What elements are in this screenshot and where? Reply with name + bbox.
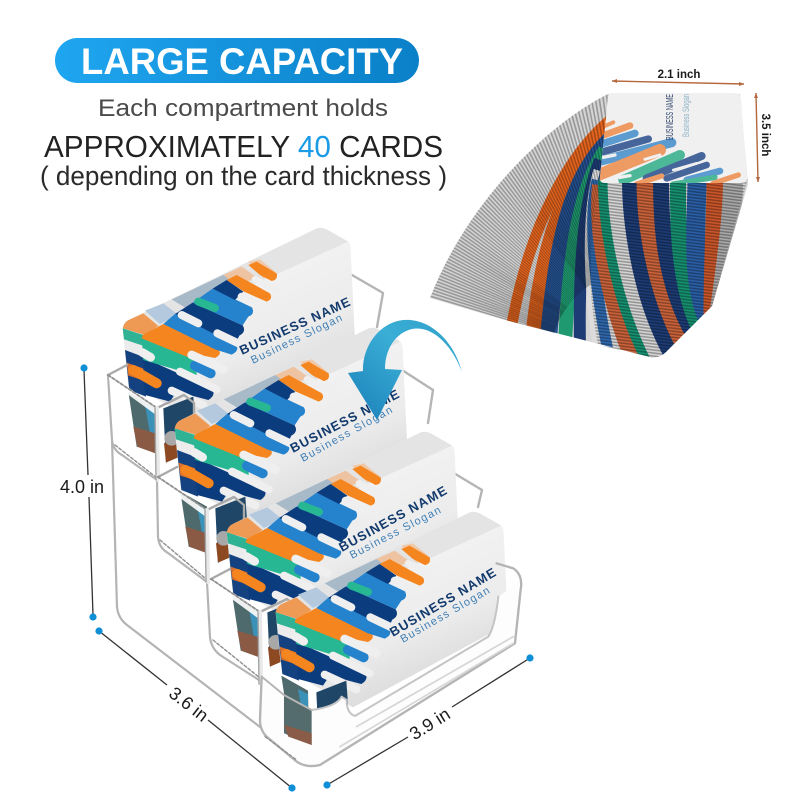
business card stack 4: Business Slogan: [398, 585, 492, 646]
title pill: LARGE CAPACITY: [81, 40, 403, 82]
business card stack 3: [211, 432, 459, 684]
icon: curved blue arrow: [348, 320, 462, 420]
business card stack 4: [276, 512, 508, 747]
business card stack 1: Business Slogan: [249, 312, 344, 367]
dimension: 3.6 in: [95, 627, 296, 792]
colored card edge bands: [510, 120, 733, 365]
subtitle: compartment text: Each compartment holds: [98, 95, 388, 122]
dimension: 4.0 in: [60, 364, 104, 621]
acrylic holder: back walls and base outline: [108, 275, 482, 727]
dimension: 3.9 in: 3.9 in: [406, 704, 454, 744]
dimension: 2.1 inch: 2.1 inch: [658, 69, 700, 81]
subtitle: compartment text: APPROXIMATELY 40 CARDS: [44, 129, 443, 164]
business card stack 2: Business Slogan: [299, 404, 395, 465]
subtitle: compartment text: ( depending on the card thickness ): [40, 161, 447, 191]
dimension: 4.0 in: 4.0 in: [60, 477, 104, 497]
top card face: [598, 93, 747, 184]
dimension: 3.6 in: 3.6 in: [165, 683, 212, 726]
business card stack 2: [158, 328, 407, 582]
dimension: 3.5 inch: 3.5 inch: [759, 114, 771, 156]
fanned card stack: [430, 93, 748, 358]
top card face: BUSINESS NAME: [665, 94, 676, 140]
subtitle: compartment text: [40, 95, 447, 191]
business card stack 2: BUSINESS NAME: [287, 386, 402, 456]
business card stack 1: [108, 228, 355, 480]
business card stack 3: BUSINESS NAME: [336, 483, 450, 555]
dimension: 3.9 in: [323, 654, 534, 789]
dimension: 2.1 inch: [612, 69, 744, 86]
top card face: Business Slogan: [681, 94, 691, 137]
business card stack 1: BUSINESS NAME: [237, 294, 353, 358]
dimension: 3.5 inch: [754, 93, 771, 182]
business card stack 3: Business Slogan: [348, 504, 443, 562]
business card stack 4: BUSINESS NAME: [387, 565, 499, 640]
acrylic holder: front compartment: [260, 563, 521, 766]
